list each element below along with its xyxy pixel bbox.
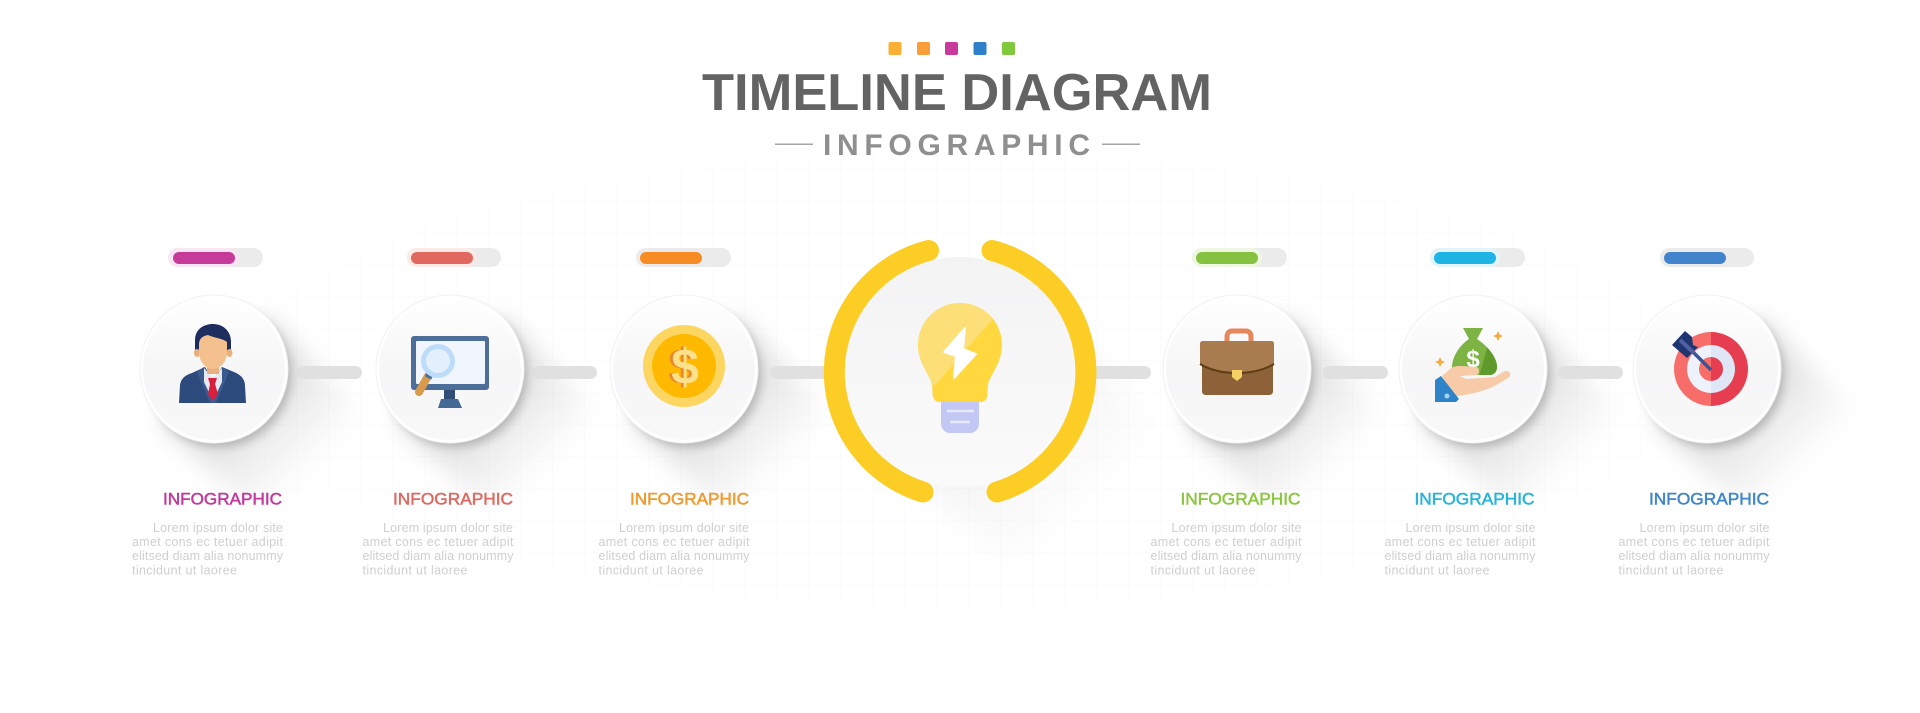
- icon: dollar coin: [643, 325, 725, 407]
- label: INFOGRAPHIC: [1649, 490, 1769, 508]
- description: amet cons ec tetuer adipit: [598, 535, 750, 549]
- centre hub: light bulb: [834, 250, 1086, 492]
- hub disc: [845, 257, 1075, 487]
- text block: step 4: [1150, 490, 1302, 578]
- circle: [140, 295, 291, 447]
- description: Lorem ipsum dolor site: [1640, 521, 1770, 535]
- circle: [1633, 295, 1784, 447]
- progress bar: green: [1192, 248, 1287, 267]
- step 3: coin: [610, 248, 761, 447]
- description: Lorem ipsum dolor site: [383, 521, 513, 535]
- description: tincidunt ut laoree: [1618, 564, 1724, 578]
- progress bar: cyan: [1430, 248, 1525, 267]
- icon: dartboard: [1672, 331, 1748, 406]
- label: INFOGRAPHIC: [163, 490, 282, 508]
- ring arcs: [834, 250, 1086, 492]
- description: [598, 521, 750, 578]
- text block: step 3: [598, 490, 750, 578]
- icon: monitor with magnifier: [411, 336, 489, 408]
- title: TIMELINE DIAGRAM: [702, 64, 1212, 122]
- step 5: money in hand: [1399, 248, 1550, 447]
- header colour squares: [888, 42, 1015, 55]
- description: Lorem ipsum dolor site: [153, 521, 283, 535]
- icon: dollar coin: $: [668, 339, 696, 395]
- description: amet cons ec tetuer adipit: [1150, 535, 1302, 549]
- description: elitsed diam alia nonummy: [598, 549, 750, 563]
- icon: businessman: [179, 324, 246, 403]
- description: tincidunt ut laoree: [362, 564, 468, 578]
- text block: step 1: [132, 490, 284, 578]
- description: Lorem ipsum dolor site: [619, 521, 749, 535]
- description: elitsed diam alia nonummy: [1618, 549, 1770, 563]
- description: tincidunt ut laoree: [1384, 564, 1490, 578]
- description: [1618, 521, 1770, 578]
- progress bar: coral: [407, 248, 501, 267]
- description: [1150, 521, 1302, 578]
- description: amet cons ec tetuer adipit: [362, 535, 514, 549]
- progress bar: orange: [636, 248, 731, 267]
- icon: money bag on hand: [1435, 328, 1510, 402]
- text block: step 6: [1618, 490, 1770, 578]
- label: INFOGRAPHIC: [630, 490, 749, 508]
- description: [1384, 521, 1536, 578]
- icon: briefcase: [1200, 331, 1274, 395]
- label: INFOGRAPHIC: [1180, 490, 1300, 508]
- description: Lorem ipsum dolor site: [1172, 521, 1302, 535]
- step 2: monitor: [376, 248, 527, 447]
- label: INFOGRAPHIC: [393, 490, 513, 508]
- circle: [1163, 295, 1314, 447]
- icon: money bag on hand: $: [1466, 346, 1480, 373]
- description: amet cons ec tetuer adipit: [132, 535, 284, 549]
- icon: bulb: [918, 303, 1002, 433]
- step 1: person: [140, 248, 291, 447]
- description: [132, 521, 284, 578]
- description: tincidunt ut laoree: [598, 564, 704, 578]
- description: elitsed diam alia nonummy: [132, 549, 284, 563]
- circle: [610, 295, 761, 447]
- long soft shadows: [162, 299, 1847, 568]
- progress bar: blue: [1660, 248, 1754, 267]
- step 4: briefcase: [1163, 248, 1314, 447]
- circle: [1399, 295, 1550, 447]
- description: amet cons ec tetuer adipit: [1618, 535, 1770, 549]
- description: amet cons ec tetuer adipit: [1384, 535, 1536, 549]
- description: elitsed diam alia nonummy: [1384, 549, 1536, 563]
- description: tincidunt ut laoree: [132, 564, 237, 578]
- subtitle: INFOGRAPHIC: [823, 129, 1090, 162]
- description: elitsed diam alia nonummy: [362, 549, 514, 563]
- description: Lorem ipsum dolor site: [1406, 521, 1536, 535]
- progress bar: magenta: [168, 248, 263, 267]
- step 6: target: [1633, 248, 1784, 447]
- circle: [376, 295, 527, 447]
- label: INFOGRAPHIC: [1414, 490, 1534, 508]
- description: elitsed diam alia nonummy: [1150, 549, 1302, 563]
- connectors: [297, 366, 1623, 379]
- description: [362, 521, 514, 578]
- text block: step 2: [362, 490, 514, 578]
- text block: step 5: [1384, 490, 1536, 578]
- description: tincidunt ut laoree: [1150, 564, 1256, 578]
- icon: dollar coin: $: [671, 339, 699, 395]
